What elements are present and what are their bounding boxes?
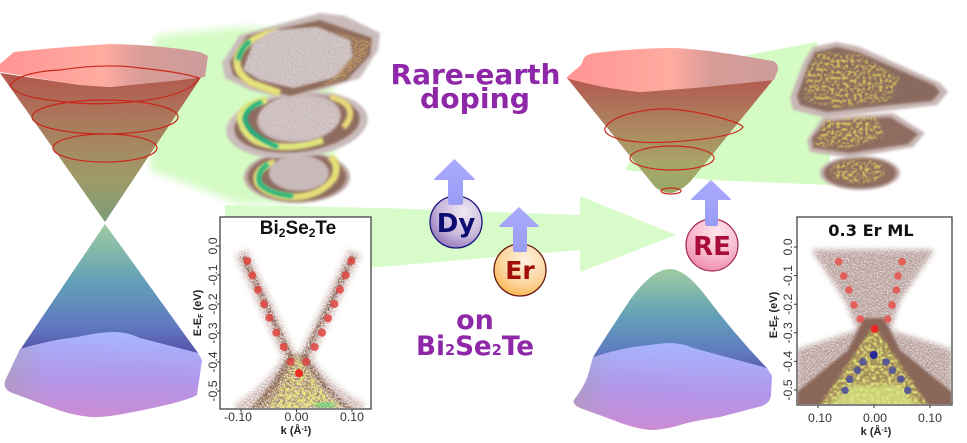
dome body (593, 269, 767, 375)
heading: rare-earth doping: Rare-earth (390, 58, 560, 91)
x axis labels: 0.10 (808, 411, 832, 425)
y axis ticks and labels: E-E (192, 318, 204, 336)
heading: rare-earth doping: doping (420, 82, 530, 115)
x axis labels: -0.10 (224, 410, 252, 424)
map: lower energy (820, 156, 900, 190)
atom: Er with spin arrow (494, 207, 546, 296)
cone lid (566, 48, 778, 92)
cone lid (0, 44, 208, 87)
x axis labels: ) (308, 425, 312, 437)
y axis ticks and labels: 0.0 (206, 237, 220, 255)
x axis labels (808, 411, 942, 438)
atom: RE with spin arrow: RE (693, 232, 731, 262)
left lower Dirac cone (5, 224, 202, 417)
plot background (797, 217, 952, 405)
y axis ticks and labels: -0.3 (781, 322, 795, 343)
y axis ticks and labels: -0.4 (781, 351, 795, 372)
cone body (0, 73, 202, 222)
photoemission intensity (238, 252, 362, 410)
heading: on Bi2Se2Te (416, 305, 534, 362)
chart title: 0.3 Er ML (828, 221, 914, 240)
constant energy contours (10, 66, 199, 162)
y axis ticks and labels: -0.2 (206, 293, 220, 315)
y axis ticks and labels: F (774, 315, 781, 320)
y axis ticks and labels: -0.5 (781, 379, 795, 401)
plot background (220, 217, 371, 409)
y axis ticks and labels: -0.1 (781, 265, 795, 286)
chart title: Te (315, 218, 336, 239)
lid shading (5, 332, 113, 417)
y axis ticks and labels: 0.0 (781, 238, 795, 256)
left constant energy maps (222, 13, 380, 203)
y axis ticks and labels: E-E (768, 320, 780, 338)
photoemission intensity (797, 250, 952, 408)
y axis ticks and labels: -0.2 (781, 293, 795, 315)
x axis labels: 0.10 (340, 410, 364, 424)
green beam: left cone to left maps (150, 27, 335, 204)
dome lid shading (574, 343, 672, 430)
cone body (567, 78, 773, 193)
chart: Bi2Se2Te ARPES dispersion (192, 217, 371, 437)
y axis ticks and labels: -0.4 (206, 351, 220, 373)
heading: on Bi2Se2Te: on (456, 305, 494, 336)
atom: RE with spin arrow (686, 180, 738, 271)
map: upper energy (790, 42, 948, 118)
heading: on Bi2Se2Te: Bi2Se2Te (416, 331, 534, 362)
frame (220, 217, 371, 409)
x axis labels: 0.00 (285, 410, 309, 424)
x axis labels: k (Å (281, 425, 301, 437)
green beam: right cone to right maps (625, 42, 830, 185)
chart title: 2 (279, 226, 286, 240)
y axis ticks and labels (192, 237, 352, 412)
chart title: Bi (260, 218, 279, 239)
x axis labels: -1 (301, 426, 308, 433)
frame (797, 217, 952, 405)
atom: Er with spin arrow: Er (505, 256, 535, 285)
chart title: 2 (309, 226, 316, 240)
map: upper energy (222, 13, 380, 100)
x axis labels: k (Å (861, 426, 881, 438)
chart: 0.3 Er ML ARPES dispersion (768, 217, 952, 438)
y axis ticks and labels: -0.3 (206, 322, 220, 344)
y axis ticks and labels: -0.1 (206, 264, 220, 286)
map: lower energy (244, 151, 350, 203)
x axis labels: 0.10 (918, 411, 942, 425)
atom: Dy with spin arrow: Dy (437, 209, 475, 239)
valence cone body (20, 224, 198, 353)
map: middle energy (807, 113, 925, 158)
y axis ticks and labels: (eV) (192, 289, 204, 314)
y axis ticks and labels (768, 238, 930, 408)
dome lid (574, 343, 772, 430)
y axis ticks and labels: F (198, 313, 205, 318)
right lower valence band dome (574, 269, 772, 430)
heading: rare-earth doping (390, 58, 560, 115)
x axis labels: ) (888, 426, 892, 438)
chart title: Se (285, 218, 309, 239)
y axis ticks and labels: -0.5 (206, 380, 220, 402)
map: middle energy (223, 85, 371, 165)
constant energy contours (605, 109, 743, 194)
x axis labels (224, 410, 364, 437)
right constant energy maps (790, 42, 948, 190)
valence band points (841, 351, 912, 394)
x axis labels: -1 (881, 427, 888, 434)
atom: Dy with spin arrow (430, 159, 482, 248)
green arrow: doping transition (225, 196, 676, 272)
fitted band points (243, 257, 355, 377)
right upper gapped cone (566, 48, 778, 194)
valence cone lid (5, 332, 202, 417)
conduction band points (835, 258, 906, 333)
y axis ticks and labels: (eV) (768, 291, 780, 316)
x axis labels: 0.00 (863, 411, 887, 425)
left upper Dirac cone (0, 44, 208, 222)
